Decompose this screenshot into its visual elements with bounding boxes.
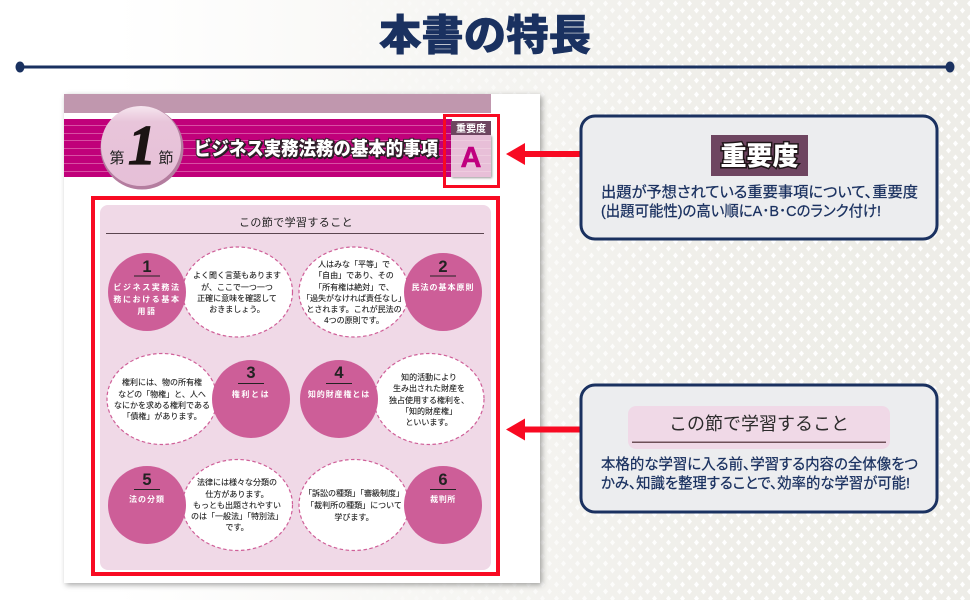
panel: learning summary: [100, 205, 491, 570]
callout: learning summary: 本格的な学習に入る前、学習する内容の全体像をつ: [601, 456, 918, 473]
item 5: 5: [142, 471, 152, 489]
callout: importance: 出題が予想されている重要事項について、重要度: [601, 184, 918, 201]
section number badge: [100, 106, 184, 190]
callout heading: [628, 406, 890, 449]
item 2: 「所有権は絶対」で、: [314, 282, 394, 292]
callout heading: この節で学習すること: [669, 414, 849, 434]
item 4: [300, 354, 484, 444]
item 6: [299, 460, 482, 550]
callout: learning summary: [581, 385, 937, 512]
item 3: 「債権」があります。: [122, 411, 202, 421]
title: 本書の特長: [379, 12, 591, 59]
item 1: よく聞く言葉もあります: [193, 270, 281, 280]
item 5: 法の分類: [129, 494, 165, 504]
item 2: 「自由」であり、その: [314, 270, 394, 280]
arrow: to importance badge: [506, 143, 581, 165]
item 5: もっとも出題されやすい: [193, 500, 281, 510]
panel: book page: [64, 94, 540, 583]
red highlight: learning summary: [93, 198, 498, 574]
item 6: 「訴訟の種類」「審級制度」: [304, 488, 404, 498]
item 5: [108, 460, 292, 550]
item 2: 4つの原則です。: [324, 316, 384, 325]
item 2: 「過失がなければ責任なし」: [302, 293, 406, 303]
title rule: [16, 62, 954, 72]
item 3: 3: [246, 364, 256, 382]
item 4: 独占使用する権利を、: [389, 395, 469, 405]
item 1: 1: [142, 258, 152, 276]
item 6: 6: [438, 471, 448, 489]
section title: ビジネス実務法務の基本的事項: [194, 137, 438, 160]
item 5: のは「一般法」「特別法」: [191, 511, 283, 521]
callout: learning summary: かみ、知識を整理することで、効率的な学習が可能!: [601, 475, 910, 492]
item 4: 生み出された財産を: [393, 383, 465, 393]
item 1: 用語: [137, 307, 157, 316]
callout: importance: (出題可能性)の高い順にA･B･Cのランク付け!: [601, 203, 881, 220]
item 6: 学びます。: [334, 512, 374, 522]
section number badge: 節: [158, 150, 174, 167]
callout: importance: [581, 116, 937, 239]
item 5: 法律には様々な分類の: [197, 477, 277, 487]
item 1: おきましょう。: [209, 305, 265, 314]
arrow: to learning summary: [506, 418, 581, 440]
item 1: 正確に意味を確認して: [197, 293, 277, 303]
item 3: [107, 354, 290, 444]
item 2: 民法の基本原則: [412, 282, 474, 292]
item 5: 仕方があります。: [205, 489, 269, 499]
item 2: とされます。これが民法の: [306, 304, 402, 314]
item 5: です。: [225, 523, 249, 532]
item 2: 2: [438, 258, 448, 276]
importance badge: 重要度: [456, 122, 486, 135]
item 6: 裁判所: [430, 494, 456, 504]
item 1: が、ここで一つ一つ: [201, 282, 273, 292]
callout heading: 重要度: [720, 141, 799, 171]
item 2: [299, 247, 482, 337]
item 1: 務における基本: [113, 294, 181, 304]
section number badge: 第: [109, 150, 125, 167]
importance badge: [451, 121, 491, 177]
section number badge: 1: [128, 115, 156, 177]
callout heading: [711, 135, 808, 176]
item 4: 「知的財産権」: [401, 406, 457, 416]
item 3: 権利には、物の所有権: [122, 377, 202, 387]
item 2: 人はみな「平等」で: [318, 259, 390, 269]
section header band: [64, 106, 452, 190]
item 6: 「裁判所の種類」について: [306, 500, 402, 510]
item 3: などの「物権」と、人へ: [118, 389, 206, 399]
item 3: なにかを求める権利である: [114, 400, 210, 410]
item 1: ビジネス実務法: [113, 282, 181, 292]
importance badge: A: [461, 142, 482, 174]
item 4: といいます。: [405, 418, 453, 427]
item 3: 権利とは: [232, 389, 270, 399]
item 4: 知的活動により: [401, 372, 457, 382]
item 1: [108, 247, 292, 337]
item 4: 4: [334, 364, 344, 382]
item 4: 知的財産権とは: [308, 389, 370, 399]
red highlight: importance badge: [444, 116, 498, 186]
panel: learning summary: この節で学習すること: [239, 215, 353, 229]
background: [340, 0, 970, 600]
